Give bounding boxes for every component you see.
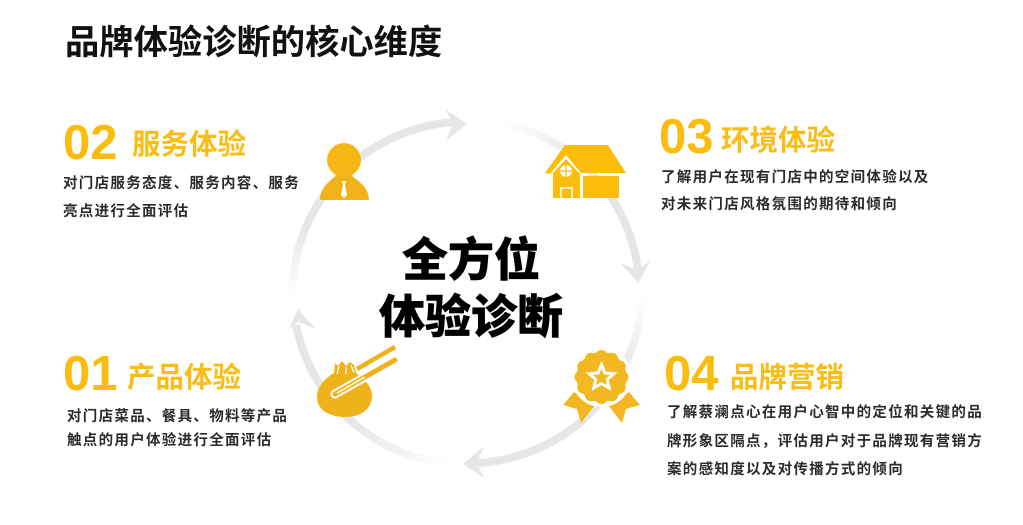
text block: 对未来门店风格氛围的期待和倾向 [661, 197, 898, 213]
number 03: 03 [659, 110, 714, 164]
text block: 亮点进行全面评估 [63, 204, 189, 220]
panel: 03 environment experience [659, 110, 930, 213]
text block: 牌形象区隔点，评估用户对于品牌现有营销方 [667, 434, 983, 450]
center text: 体验诊断 [379, 291, 563, 343]
heading: 产品体验 [127, 362, 241, 394]
text block: 对门店服务态度、服务内容、服务 [63, 176, 300, 192]
icon: award badge [563, 350, 640, 423]
icon: house [545, 145, 626, 198]
heading: 品牌营销 [730, 362, 844, 394]
text block [67, 408, 288, 449]
text block [661, 169, 930, 213]
text block: 触点的用户体验进行全面评估 [67, 433, 272, 449]
title: 品牌体验诊断的核心维度 [65, 24, 442, 62]
heading: 服务体验 [132, 129, 246, 161]
heading: 环境体验 [721, 125, 835, 157]
panel: 01 product experience [63, 347, 288, 449]
arrow: service to environment [292, 109, 467, 300]
number 04: 04 [664, 347, 719, 401]
text block: 了解蔡澜点心在用户心智中的定位和关键的品 [667, 405, 983, 421]
text block [667, 404, 983, 478]
text block [63, 175, 300, 220]
text block: 对门店菜品、餐具、物料等产品 [67, 409, 288, 425]
number 02: 02 [63, 116, 118, 170]
panel: 04 brand marketing [664, 347, 983, 478]
text block: 案的感知度以及对传播方式的倾向 [667, 462, 904, 478]
panel: 02 service experience [63, 116, 300, 220]
icon: bun with chopsticks [316, 345, 398, 417]
arrow: brand to product [463, 295, 642, 478]
center text: 全方位 [402, 234, 540, 286]
center text [379, 234, 563, 343]
arrow: product to service [289, 309, 450, 464]
text block: 了解用户在现有门店中的空间体验以及 [661, 170, 930, 186]
number 01: 01 [63, 347, 118, 401]
icon: person with tie [320, 143, 369, 200]
arrow: environment to brand [500, 122, 651, 283]
